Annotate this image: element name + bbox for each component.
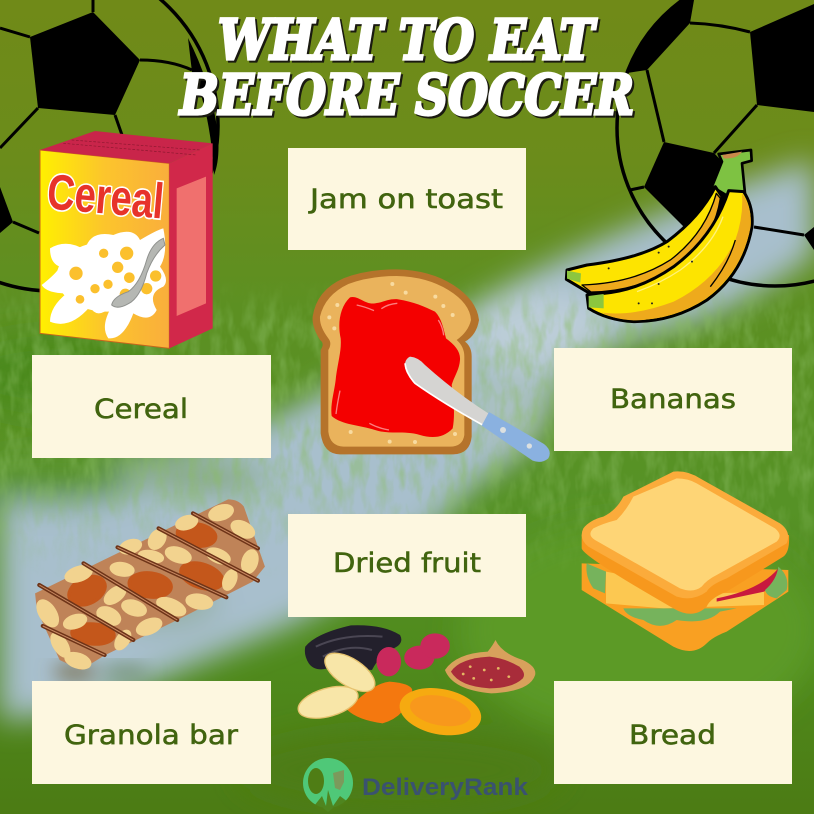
rear banana	[566, 187, 722, 293]
icon: toast with jam and knife	[313, 269, 550, 462]
milk splash	[42, 228, 166, 338]
top slice face	[590, 478, 780, 590]
banana chips	[294, 680, 362, 724]
label card: Jam on toast	[288, 148, 526, 250]
soccer ball: left	[0, 0, 218, 291]
title: BEFORE SOCCER	[178, 62, 634, 127]
icon: cereal box	[40, 131, 213, 348]
label card: Cereal	[32, 355, 271, 458]
label card: Bananas	[554, 348, 792, 451]
stem	[712, 150, 752, 197]
oats	[34, 503, 260, 671]
jam	[331, 297, 460, 437]
title: BEFORE SOCCER	[180, 64, 636, 129]
icon: sandwich	[582, 471, 789, 651]
label card: Bananas: Bananas	[610, 384, 736, 415]
title: WHAT TO EAT	[220, 9, 599, 74]
icon: granola bar	[34, 499, 265, 671]
top slice rim	[582, 471, 788, 598]
label card: Cereal: Cereal	[94, 394, 188, 425]
label card: Bread	[554, 681, 792, 784]
icon: bananas	[566, 150, 752, 322]
orange apricot	[347, 682, 412, 723]
label card: Granola bar	[32, 681, 271, 784]
front banana	[587, 191, 752, 322]
knife handle	[482, 412, 550, 462]
title: WHAT TO EAT	[218, 7, 597, 72]
cereal box wordmark: Cereal	[45, 164, 166, 229]
soccer ball: right	[617, 0, 814, 286]
chocolate drizzle	[39, 513, 258, 655]
icon: dried fruit	[294, 625, 535, 742]
label card: Jam on toast: Jam on toast	[308, 184, 503, 215]
spoon	[112, 238, 165, 307]
logo: DeliveryRank	[303, 758, 529, 812]
label card: Dried fruit: Dried fruit	[333, 548, 481, 579]
almonds	[64, 521, 226, 646]
golden apricot	[395, 681, 486, 742]
label card: Bread: Bread	[629, 720, 716, 751]
berries	[377, 633, 450, 676]
logo: DeliveryRank: DeliveryRank	[362, 774, 529, 801]
label card: Dried fruit	[288, 514, 526, 617]
title	[178, 7, 636, 129]
label card: Granola bar: Granola bar	[64, 720, 239, 751]
knife blade	[405, 357, 488, 425]
top slice side	[582, 535, 789, 614]
fig	[445, 640, 535, 693]
prune	[305, 625, 401, 670]
logo mark	[303, 758, 353, 812]
